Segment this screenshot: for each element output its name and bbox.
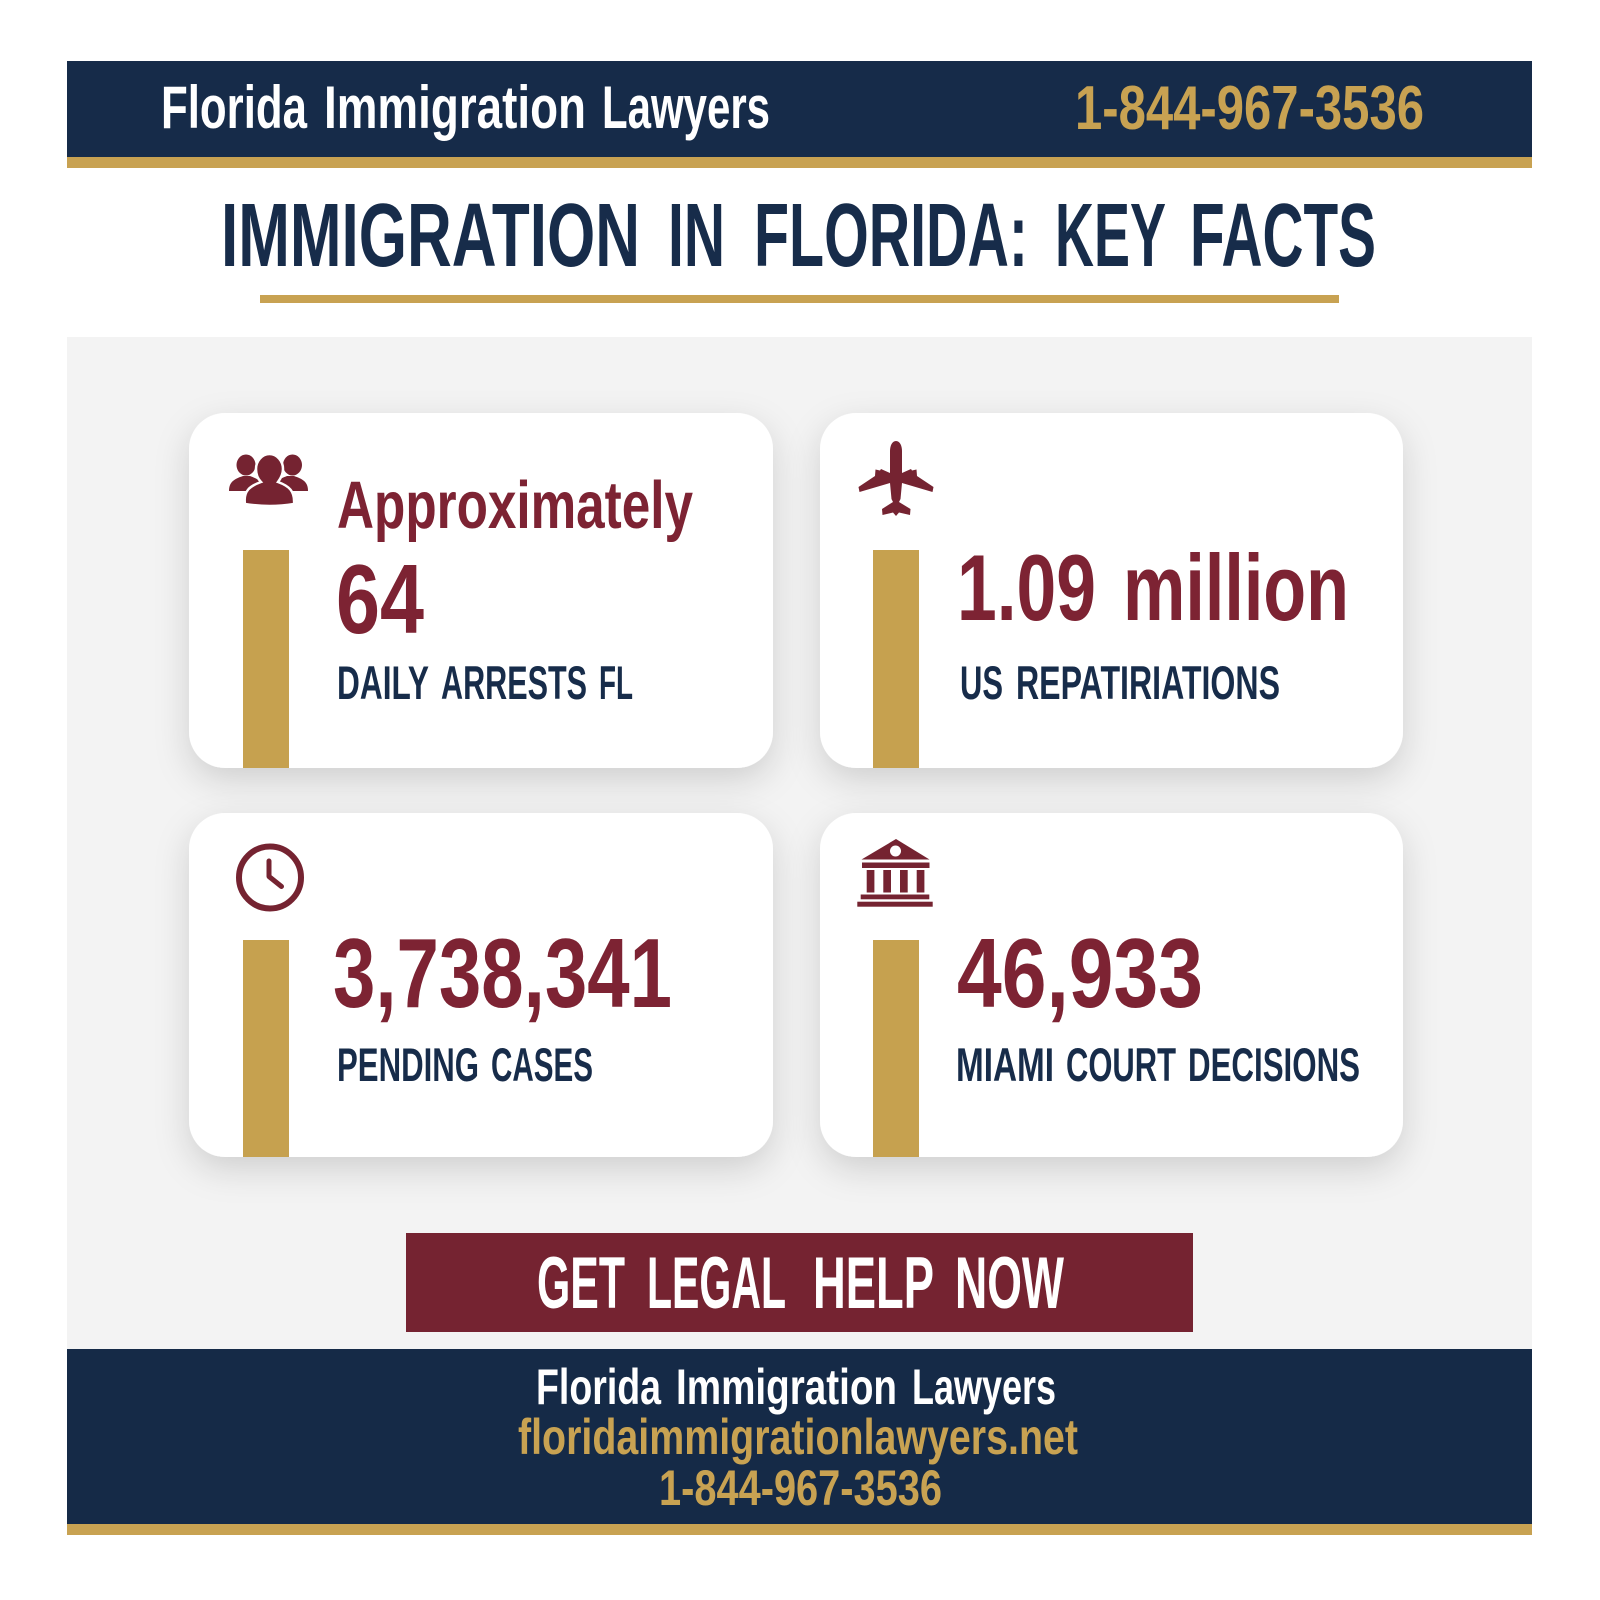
call to action button: GET bbox=[537, 1243, 625, 1324]
header firm name: Lawyers bbox=[602, 74, 770, 141]
call to action button: LEGAL bbox=[647, 1243, 786, 1324]
footer phone number: 1-844-967-3536 bbox=[659, 1460, 942, 1516]
label: court decisions: COURT bbox=[1066, 1038, 1176, 1091]
label: court decisions: MIAMI bbox=[956, 1038, 1054, 1091]
card: daily arrests bbox=[189, 413, 773, 768]
stat: pending count: 3,738,341 bbox=[333, 918, 672, 1028]
stat: 1.09 million: million bbox=[1123, 535, 1349, 640]
header firm name: Florida bbox=[161, 74, 307, 141]
title: KEY bbox=[1055, 186, 1166, 286]
call to action button bbox=[406, 1233, 1193, 1332]
title: IN bbox=[668, 186, 725, 286]
label: repatriations: US bbox=[960, 656, 1003, 709]
header band bbox=[67, 61, 1532, 168]
label: daily arrests: FL bbox=[599, 656, 633, 709]
header firm name bbox=[161, 74, 770, 141]
header firm name: Immigration bbox=[324, 74, 586, 141]
stat: 1.09 million: 1.09 bbox=[957, 535, 1096, 640]
label: repatriations bbox=[960, 656, 1280, 709]
label: pending cases: PENDING bbox=[337, 1038, 479, 1091]
icon: airplane bbox=[858, 441, 934, 516]
label: repatriations: REPATIRIATIONS bbox=[1016, 656, 1280, 709]
call to action button: HELP bbox=[813, 1243, 934, 1324]
background panel bbox=[67, 337, 1532, 1349]
footer firm name: Immigration bbox=[676, 1359, 897, 1415]
call to action button: NOW bbox=[955, 1243, 1064, 1324]
footer firm name bbox=[536, 1359, 1056, 1415]
footer firm name: Florida bbox=[536, 1359, 662, 1415]
footer band bbox=[67, 1349, 1532, 1535]
footer firm name: Lawyers bbox=[912, 1359, 1056, 1415]
label: daily arrests: ARRESTS bbox=[441, 656, 587, 709]
title: IMMIGRATION bbox=[221, 186, 640, 286]
stat: 1.09 million bbox=[957, 535, 1349, 640]
title: FACTS bbox=[1190, 186, 1376, 286]
title: FLORIDA: bbox=[754, 186, 1028, 286]
title bbox=[221, 186, 1376, 286]
header phone number: 1-844-967-3536 bbox=[1075, 74, 1424, 143]
label: pending cases: CASES bbox=[491, 1038, 593, 1091]
icon: people bbox=[229, 454, 308, 506]
icon: courthouse bbox=[857, 839, 933, 907]
card: court decisions bbox=[820, 813, 1403, 1157]
label: court decisions bbox=[956, 1038, 1360, 1091]
stat: approximately: Approximately bbox=[337, 468, 693, 543]
label: daily arrests: DAILY bbox=[337, 656, 429, 709]
stat: 64: 64 bbox=[336, 544, 424, 654]
label: daily arrests bbox=[337, 656, 633, 709]
title underline bbox=[260, 295, 1339, 303]
stat: court decisions count: 46,933 bbox=[957, 918, 1203, 1028]
card: pending cases bbox=[189, 813, 773, 1157]
icon: clock bbox=[239, 846, 301, 908]
label: court decisions: DECISIONS bbox=[1188, 1038, 1360, 1091]
card: repatriations bbox=[820, 413, 1403, 768]
footer website: floridaimmigrationlawyers.net bbox=[518, 1409, 1078, 1465]
